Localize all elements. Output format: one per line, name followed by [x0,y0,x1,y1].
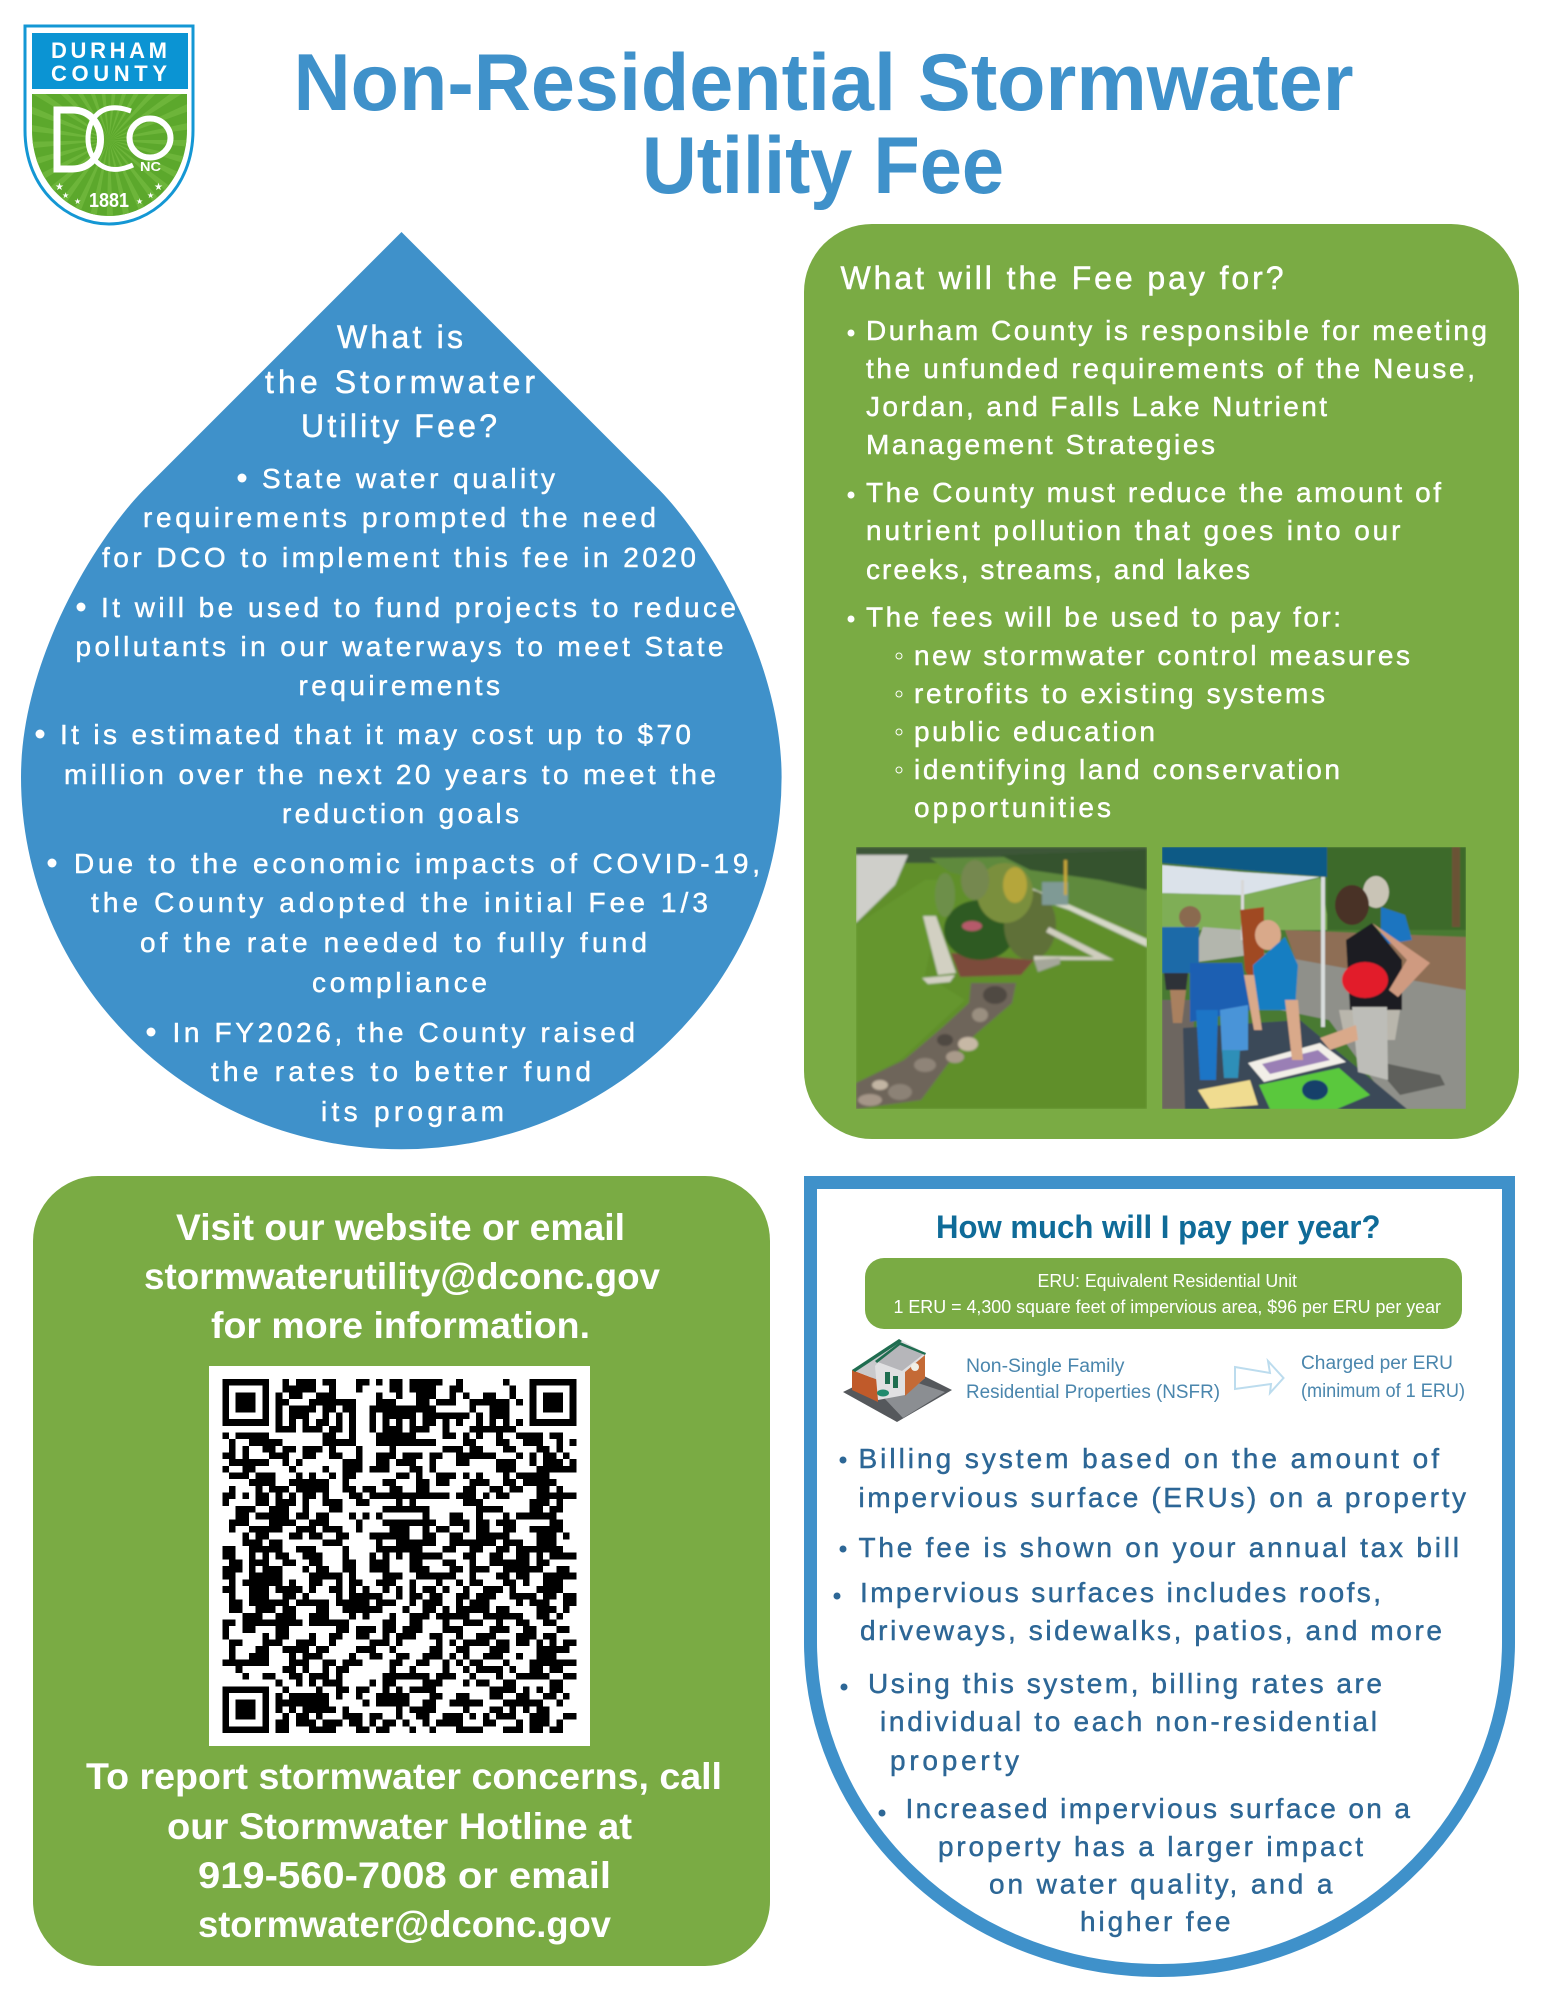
panel: what is the stormwater utility fee (water drop) [21,232,782,1149]
logo: Durham County shield: ★ [154,182,163,193]
logo: Durham County shield: ★ [74,197,81,206]
bullet: funding projects: It will be used to fund projects to reduce [101,592,736,623]
bullet: larger impact: Increased impervious surface on a [906,1793,1410,1824]
bullet: estimated cost: reduction goals [282,798,519,829]
icon: commercial building [843,1339,952,1422]
bullet: fee uses with sub-list: new stormwater control measures [914,640,1410,671]
bullet: larger impact: property has a larger impact [938,1831,1363,1862]
label: charged per ERU: (minimum of 1 ERU) [1301,1381,1465,1402]
bullet: state requirements: for DCO to implement this fee in 2020 [102,542,696,573]
label: charged per ERU [1301,1353,1465,1402]
bullet: covid impacts: the County adopted the initial Fee 1/3 [91,887,708,918]
QR code [209,1366,590,1746]
bullet: individual rates [840,1668,1382,1776]
bullet: larger impact: on water quality, and a [989,1868,1333,1900]
bullet: reduce pollution: The County must reduce the amount of [866,477,1441,508]
logo: Durham County shield: COUNTY [51,61,167,86]
bullet: impervious surfaces: Impervious surfaces includes roofs, [860,1577,1381,1608]
bullet: estimated cost: million over the next 20 years to meet the [64,759,716,790]
bullet: nutrient strategies: Management Strategies [866,429,1215,460]
water drop shape [21,232,782,1149]
ERU definition pill: 1 ERU = 4,300 square feet of impervious area, $96 per ERU per year [894,1297,1441,1317]
logo: Durham County shield: 1881 [89,190,129,212]
panel: how much will I pay per year [810,1182,1508,1970]
bullet: FY2026 rates: its program [321,1096,504,1127]
outlined shield shape [810,1182,1508,1970]
bullet: state requirements [102,463,696,573]
logo: Durham County shield: DURHAM [51,38,167,63]
bullet: nutrient strategies: Jordan, and Falls Lake Nutrient [866,391,1327,422]
bullet: covid impacts: compliance [312,967,487,998]
logo: Durham County shield: ★ [62,191,69,200]
bullet: FY2026 rates [146,1017,635,1127]
arrow [1235,1361,1284,1393]
bullet: covid impacts: Due to the economic impacts of COVID-19, [74,848,760,879]
hotline text [86,1756,722,1945]
bullet: estimated cost [36,719,716,829]
green panel background [804,224,1519,1139]
green panel background [33,1176,770,1966]
website call to action: Visit our website or email [176,1207,625,1248]
bullet: estimated cost: It is estimated that it may cost up to $70 [60,719,691,750]
bullet: fee uses with sub-list: identifying land conservation [914,754,1340,785]
bullet: larger impact [878,1793,1410,1937]
photo: outreach table [1162,847,1466,1109]
bullet: nutrient strategies: Durham County is responsible for meeting [866,315,1487,346]
ERU definition pill: ERU: Equivalent Residential Unit [1038,1271,1297,1291]
bullet: billing system: impervious surface (ERUs) on a property [858,1482,1466,1513]
bullet: reduce pollution: nutrient pollution that goes into our [866,515,1400,546]
drop heading: the Stormwater [265,364,535,400]
bullet: covid impacts [48,848,760,998]
website call to action: for more information. [211,1305,590,1346]
bullet: impervious surfaces: driveways, sidewalks, patios, and more [860,1615,1442,1646]
panel heading: How much will I pay per year? [936,1209,1380,1245]
drop heading [265,319,535,444]
website call to action: stormwaterutility@dconc.gov [144,1256,660,1297]
bullet: impervious surfaces [834,1577,1442,1646]
bullet: fee uses with sub-list: The fees will be used to pay for: [866,602,1341,632]
bullet: state requirements: requirements prompted the need [143,502,656,533]
title: Utility Fee [642,121,1004,211]
title: Non-Residential Stormwater [294,38,1354,128]
logo: Durham County shield: ★ [136,197,143,206]
bullet: FY2026 rates: In FY2026, the County raised [172,1017,635,1048]
logo: Durham County shield: NC [140,159,162,174]
logo: Durham County shield [25,26,193,224]
drop heading: Utility Fee? [301,408,497,444]
bullet: funding projects [76,592,736,701]
label: charged per ERU: Charged per ERU [1301,1353,1453,1374]
bullet: FY2026 rates: the rates to better fund [211,1056,591,1087]
bullet: fee uses with sub-list [848,602,1410,823]
bullet: billing system: Billing system based on the amount of [858,1443,1439,1474]
panel: what will the fee pay for [804,224,1519,1139]
bullet: covid impacts: of the rate needed to fully fund [140,927,647,958]
bullet: billing system [840,1443,1466,1513]
photo: rain garden [856,847,1147,1109]
logo: Durham County shield: ★ [55,182,64,193]
bullet: fee uses with sub-list: retrofits to existing systems [914,678,1325,709]
bullet: funding projects: requirements [298,670,500,701]
bullet: funding projects: pollutants in our waterways to meet State [76,631,724,662]
panel heading: What will the Fee pay for? [840,260,1284,296]
bullet: reduce pollution [848,477,1441,585]
bullet: state requirements: State water quality [262,463,555,494]
hotline text: 919-560-7008 or email [198,1855,611,1896]
bullet: fee uses with sub-list: opportunities [914,792,1111,823]
bullet: fee uses with sub-list: public education [914,716,1155,747]
hotline text: To report stormwater concerns, call [86,1756,722,1797]
bullet: tax bill: The fee is shown on your annual tax bill [858,1532,1459,1563]
bullet: larger impact: higher fee [1080,1906,1230,1937]
website call to action [144,1207,660,1346]
bullet: nutrient strategies: the unfunded requirements of the Neuse, [866,353,1475,384]
label: non-single family properties: Non-Single Family [966,1356,1125,1377]
hotline text: stormwater@dconc.gov [198,1904,611,1945]
panel: contact and QR code [33,1176,770,1966]
bullet: nutrient strategies [848,315,1487,460]
bullet: individual rates: individual to each non-residential [880,1706,1377,1737]
label: non-single family properties [966,1356,1220,1403]
bullet: individual rates: property [890,1745,1019,1776]
hotline text: our Stormwater Hotline at [167,1806,632,1847]
label: non-single family properties: Residential Properties (NSFR) [966,1382,1220,1403]
bullet: reduce pollution: creeks, streams, and lakes [866,554,1250,585]
ERU definition pill [865,1258,1462,1329]
bullet: individual rates: Using this system, billing rates are [868,1668,1382,1699]
title [294,38,1354,211]
logo: Durham County shield: ★ [147,191,154,200]
drop heading: What is [337,319,463,355]
